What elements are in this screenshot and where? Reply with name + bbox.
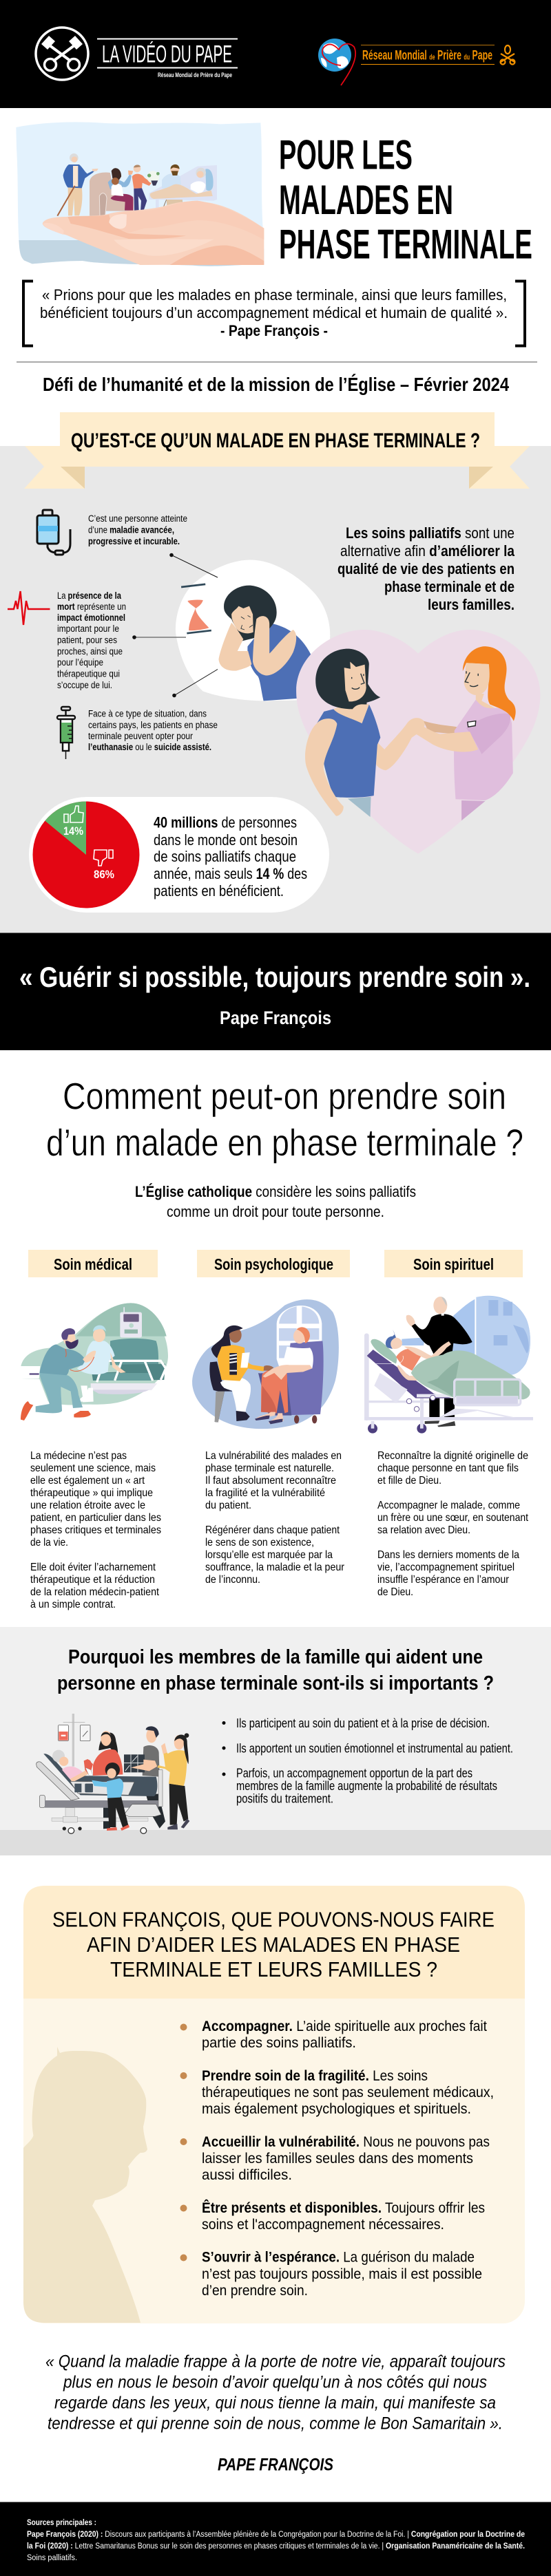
column: psychological: la fragilité et la vulnérabilité xyxy=(205,1487,325,1499)
icon: IV bag xyxy=(37,510,70,555)
connector lines xyxy=(132,553,218,697)
column: psychological xyxy=(205,1450,345,1586)
list item: vulnerability xyxy=(180,2134,490,2183)
hand xyxy=(43,201,264,265)
icon: thumbs down xyxy=(94,850,113,866)
text: definition: d’une maladie avancée, xyxy=(88,524,174,535)
tag: Soin psychologique: Soin psychologique xyxy=(214,1255,333,1273)
list item: fragility xyxy=(180,2068,494,2117)
heading: Pourquoi les membres de la famille qui aident une xyxy=(68,1646,483,1668)
nurse xyxy=(414,646,516,820)
silhouette of pope xyxy=(23,2047,147,2323)
icon: thumbs up xyxy=(64,806,83,822)
tag: Soin médical: Soin médical xyxy=(54,1255,132,1273)
text: emotional impact: La présence de la xyxy=(57,590,121,601)
woman crying xyxy=(218,586,315,701)
boy with flowers xyxy=(132,164,160,211)
card: what can we do according to Francis xyxy=(23,1886,525,2323)
column: medical: seulement une science, mais xyxy=(30,1462,156,1474)
footer: sources xyxy=(0,2502,551,2576)
section heading: how to care xyxy=(46,1075,523,1164)
patient and blanket xyxy=(371,1330,530,1399)
intro text: L’Église catholique considère les soins palliatifs xyxy=(135,1183,416,1200)
text: emotional impact: thérapeutique qui xyxy=(57,669,120,679)
woman in red xyxy=(93,1731,123,1776)
tag: Soin spirituel: Soin spirituel xyxy=(413,1255,494,1273)
list item: vulnerability: Accueillir la vulnérabilité. Nous ne pouvons pas xyxy=(202,2134,490,2150)
list item: accompany: Accompagner. L’aide spirituelle aux proches fait xyxy=(202,2019,487,2034)
woman in yellow xyxy=(157,1733,189,1829)
list item: vulnerability: aussi difficiles. xyxy=(202,2167,292,2183)
wordmark lines and text xyxy=(97,39,238,79)
hero illustration: family in a hand xyxy=(16,122,264,266)
main title: MALADES EN xyxy=(279,177,453,223)
main title xyxy=(279,132,532,267)
text: emotional impact: pour l’équipe xyxy=(57,657,103,668)
icon: heartbeat pulse xyxy=(8,591,50,625)
text: euthanasia: terminale peuvent opter pour xyxy=(88,731,193,741)
text: statistic: année, mais seuls 14 % des xyxy=(154,865,307,882)
list item: hope xyxy=(180,2249,482,2299)
list item: present: Être présents et disponibles. Toujours offrir les xyxy=(202,2200,485,2216)
column: psychological: souffrance, la maladie et la peur xyxy=(205,1562,345,1573)
bullet list: Ils participent au soin du patient et à la prise de décision. xyxy=(236,1716,490,1730)
column: psychological: Régénérer dans chaque patient xyxy=(205,1524,340,1536)
tag: Soin spirituel xyxy=(384,1250,523,1277)
panel: what is a terminally ill patient xyxy=(0,412,551,933)
orange network title: Réseau Mondial de Prière du Pape xyxy=(362,48,492,63)
list item: fragility: Prendre soin de la fragilité. Les soins xyxy=(202,2068,428,2084)
column: spiritual: chaque personne en tant que fils xyxy=(377,1462,519,1474)
text: emotional impact: proches, ainsi que xyxy=(57,646,123,657)
armchair xyxy=(258,1341,324,1423)
text: statistic: 40 millions de personnes xyxy=(154,813,297,831)
column: spiritual xyxy=(377,1450,528,1598)
armchair xyxy=(90,173,134,217)
column: medical: thérapeutique » qui implique xyxy=(30,1487,153,1499)
closing quote xyxy=(45,2352,506,2475)
column: medical: thérapeutique et la réduction xyxy=(30,1574,155,1586)
footer: sources: Sources principales : xyxy=(27,2519,96,2527)
text: emotional impact xyxy=(57,590,126,690)
column: medical xyxy=(30,1450,161,1610)
bullet list: positifs du traitement. xyxy=(236,1792,333,1806)
card header: SELON FRANÇOIS, QUE POUVONS-NOUS FAIRE xyxy=(52,1908,495,1931)
stat pill: 40 million xyxy=(29,797,329,913)
text: statistic: patients en bénéficient. xyxy=(154,882,284,900)
man and gift xyxy=(103,1726,165,1829)
wordmark lines and text: LA VIDÉO DU PAPE xyxy=(102,41,232,67)
icon: orange keys xyxy=(500,45,515,65)
list item: accompany xyxy=(180,2019,487,2051)
mother and child xyxy=(108,168,133,211)
bed xyxy=(91,1339,166,1394)
footer: sources: Pape François (2020) : Discours aux participants à l’Assemblée plénière de la Congrégation pour la Doctrine de la Foi. | Congrégation pour la Doctrine de xyxy=(27,2531,525,2539)
column: medical: Elle doit éviter l’acharnement xyxy=(30,1562,156,1573)
boy xyxy=(77,1326,126,1402)
IV pole xyxy=(59,1714,90,1767)
column: psychological: de l’inconnu. xyxy=(205,1574,260,1586)
prayer intention with brackets: bénéficient toujours d’un accompagnement médical et humain de qualité ». xyxy=(40,304,508,321)
child xyxy=(84,1760,129,1831)
column: medical: de la relation médecin-patient xyxy=(30,1586,159,1598)
list item: fragility: mais également psychologiques et spirituels. xyxy=(202,2101,471,2117)
black quote band xyxy=(0,933,551,1050)
monitor xyxy=(120,1307,142,1337)
card header xyxy=(23,1886,525,1999)
mattress and patient xyxy=(43,1750,157,1796)
text: palliative care: Les soins palliatifs sont une xyxy=(346,524,514,542)
logo: globe and heart xyxy=(318,39,355,85)
illustration: priest and patient in bed xyxy=(364,1296,533,1434)
closing quote: « Quand la maladie frappe à la porte de notre vie, apparaît toujours xyxy=(45,2352,506,2372)
text: euthanasia: l’euthanasie ou le suicide assisté. xyxy=(88,742,211,752)
patient xyxy=(305,649,425,817)
card header: TERMINALE ET LEURS FAMILLES ? xyxy=(110,1957,437,1981)
list item: hope: S’ouvrir à l’espérance. La guérison du malade xyxy=(202,2249,475,2266)
illustration: doctor and boy xyxy=(20,1303,168,1420)
hourglass xyxy=(181,584,211,633)
psychologist xyxy=(209,1326,273,1423)
pie chart 14% / 86%: 86% xyxy=(94,868,114,881)
column: psychological: La vulnérabilité des malades en xyxy=(205,1450,342,1462)
column: spiritual: un frère ou une sœur, en soutenant xyxy=(377,1512,528,1524)
list item: present xyxy=(180,2200,485,2233)
patient xyxy=(255,1327,313,1424)
closing quote: PAPE FRANÇOIS xyxy=(218,2456,333,2475)
illustration: psychologist and patient xyxy=(192,1299,339,1429)
main title: POUR LES xyxy=(279,132,413,178)
illustration: family around a hospital bed xyxy=(37,1714,189,1833)
prayer intention with brackets: - Pape François - xyxy=(220,322,328,339)
column: psychological: lorsqu’elle est marquée par la xyxy=(205,1549,333,1561)
column: psychological: Il faut absolument reconnaître xyxy=(205,1475,336,1487)
text: emotional impact: important pour le xyxy=(57,624,119,634)
text: statistic: dans le monde ont besoin xyxy=(154,831,298,849)
pie chart 14% / 86% xyxy=(33,801,139,908)
tag: Soin psychologique xyxy=(197,1250,350,1277)
text: palliative care: leurs familles. xyxy=(428,596,514,613)
tag: Soin médical xyxy=(28,1250,158,1277)
column: psychological: le sens de son existence, xyxy=(205,1537,314,1548)
column: medical: phases critiques et terminales xyxy=(30,1524,161,1536)
column: spiritual: et fille de Dieu. xyxy=(377,1475,441,1487)
window xyxy=(277,1306,322,1370)
bed frame xyxy=(364,1333,533,1434)
column: medical: une relation étroite avec le xyxy=(30,1500,145,1511)
list item: fragility: thérapeutiques ne sont pas seulement médicaux, xyxy=(202,2085,494,2100)
bullet list: membres de la famille augmente la probabilité de résultats xyxy=(236,1779,497,1793)
bullet list xyxy=(222,1716,513,1806)
text: emotional impact: s’occupe de lui. xyxy=(57,680,112,690)
priest xyxy=(406,1297,472,1427)
prayer intention with brackets: « Prions pour que les malades en phase terminale, ainsi que leurs familles, xyxy=(42,286,507,304)
intro text: comme un droit pour toute personne. xyxy=(167,1203,384,1220)
text: euthanasia xyxy=(88,709,218,752)
column: spiritual: Dans les derniers moments de la xyxy=(377,1549,519,1561)
text: palliative care: qualité de vie des patients en xyxy=(337,560,514,577)
text: palliative care: phase terminale et de xyxy=(384,578,514,595)
text: euthanasia: certains pays, les patients en phase xyxy=(88,720,218,730)
column: medical: patient, en particulier dans les xyxy=(30,1512,161,1524)
column: medical: à un simple contrat. xyxy=(30,1599,116,1610)
text: definition: progressive et incurable. xyxy=(88,536,180,546)
panel: family members xyxy=(0,1627,551,1855)
bed frame xyxy=(37,1762,163,1833)
card header: AFIN D’AIDER LES MALADES EN PHASE xyxy=(87,1933,460,1957)
logo: La Vidéo du Pape keys xyxy=(36,28,88,80)
icon: syringe xyxy=(57,707,75,759)
text: statistic xyxy=(154,813,307,900)
column: spiritual: Accompagner le malade, comme xyxy=(377,1500,520,1511)
column: medical: de la vie. xyxy=(30,1537,68,1548)
wordmark lines and text: Réseau Mondial de Prière du Pape xyxy=(158,72,232,79)
text: palliative care xyxy=(337,524,515,613)
prayer intention with brackets xyxy=(23,281,525,345)
text: emotional impact: mort représente un xyxy=(57,602,126,612)
list item: hope: d’en prendre soin. xyxy=(202,2283,308,2299)
doctor xyxy=(21,1328,96,1420)
column: spiritual: de Dieu. xyxy=(377,1586,413,1598)
column: spiritual: insuffle l’espérance en l’amour xyxy=(377,1574,510,1586)
list item: vulnerability: laisser les familles seules dans des moments xyxy=(202,2151,473,2167)
column: spiritual: sa relation avec Dieu. xyxy=(377,1524,470,1536)
black quote band: Pape François xyxy=(220,1008,331,1028)
footer: sources: Soins palliatifs. xyxy=(27,2554,77,2562)
bullet list: Parfois, un accompagnement opportun de la part des xyxy=(236,1766,472,1780)
column: medical: elle est également un « art xyxy=(30,1475,145,1487)
header band xyxy=(0,0,551,108)
text: definition xyxy=(88,513,187,546)
text: emotional impact: patient, pour ses xyxy=(57,635,117,646)
closing quote: regarde dans les yeux, qui nous tienne la main, qui manifeste sa xyxy=(54,2394,496,2413)
ribbon heading xyxy=(24,412,530,489)
footer: sources: la Foi (2020) : Lettre Samaritanus Bonus sur le soin des personnes en phases critiques et terminales de la vie. | Organisation Panaméricaine de la Santé. xyxy=(27,2542,525,2551)
illustration: heart with patient and nurse xyxy=(296,630,540,853)
bed with patient and visitor xyxy=(149,164,217,212)
illustration: sad woman with hourglass xyxy=(176,560,330,701)
heading: personne en phase terminale sont-ils si importants ? xyxy=(57,1672,494,1694)
column: spiritual: vie, l’accompagnement spirituel xyxy=(377,1562,514,1573)
text: euthanasia: Face à ce type de situation, dans xyxy=(88,709,207,718)
text: palliative care: alternative afin d’améliorer la xyxy=(340,542,515,560)
column: psychological: du patient. xyxy=(205,1500,251,1511)
text: emotional impact: impact émotionnel xyxy=(57,613,125,623)
closing quote: tendresse et qui prenne soin de nous, comme le Bon Samaritain ». xyxy=(48,2414,503,2434)
column: psychological: phase terminale est naturelle. xyxy=(205,1462,334,1474)
heading xyxy=(57,1646,494,1694)
closing quote: plus en nous le besoin d’avoir quelqu’un à nos côtés qui nous xyxy=(63,2373,487,2392)
text: definition: C’est une personne atteinte xyxy=(88,513,187,524)
bed rail xyxy=(455,1379,521,1405)
column: medical: La médecine n’est pas xyxy=(30,1450,127,1462)
list item: accompany: partie des soins palliatifs. xyxy=(202,2035,356,2051)
text columns: three kinds of care xyxy=(30,1450,528,1610)
pie chart 14% / 86%: 14% xyxy=(63,824,83,838)
list item: present: soins et l'accompagnement nécessaires. xyxy=(202,2217,444,2233)
list item: hope: n’est pas toujours possible, mais il est possible xyxy=(202,2266,482,2282)
column: spiritual: Reconnaître la dignité originelle de xyxy=(377,1450,528,1462)
intro text xyxy=(135,1183,416,1220)
text: statistic: de soins palliatifs chaque xyxy=(154,848,296,865)
old man with cane xyxy=(57,153,98,216)
